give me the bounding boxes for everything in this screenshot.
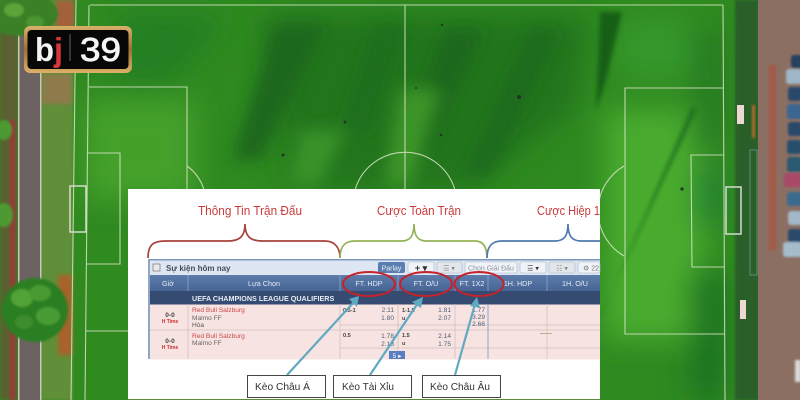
callout ring: FT. O/U	[400, 272, 452, 296]
logo: bj 39: 39	[80, 31, 121, 68]
toolbar: ☰ ▾	[527, 266, 539, 272]
column headers: Lựa Chọn	[248, 279, 280, 288]
match rows: 2.07	[438, 315, 451, 322]
league row: UEFA CHAMPIONS LEAGUE QUALIFIERS	[192, 294, 334, 303]
match rows: 0.5-1	[343, 308, 356, 314]
match rows: 2.66	[472, 321, 485, 328]
label box: Kèo Tài Xỉu	[334, 376, 412, 398]
match rows: 1.78	[381, 333, 394, 340]
toolbar: Sự kiện hôm nay	[166, 264, 231, 273]
players	[282, 24, 684, 191]
right verge and road	[735, 0, 800, 400]
match rows	[148, 259, 600, 360]
column headers: 1H. HDP	[504, 279, 532, 288]
match rows: 1.5	[402, 333, 410, 339]
brace: first half	[487, 224, 600, 258]
match rows: 1-1.5	[402, 308, 415, 314]
panel: odds table screenshot	[128, 189, 600, 400]
label box: Kèo Châu Âu	[422, 376, 500, 398]
arrow: Kèo Châu Á	[287, 296, 359, 375]
match rows: Red Bull Salzburg	[192, 307, 245, 314]
match rows: Malmo FF	[192, 340, 222, 347]
toolbar: + ▾	[415, 263, 428, 273]
logo: bj 39: j	[53, 31, 63, 68]
league row	[150, 291, 600, 304]
match rows: Malmo FF	[192, 315, 222, 322]
label box: Kèo Tài Xỉu: Kèo Tài Xỉu	[342, 381, 394, 393]
match rows: u	[402, 316, 406, 322]
match rows: 5 ▸	[393, 353, 402, 360]
match rows: 2.14	[438, 333, 451, 340]
arrow: Kèo Châu Âu	[455, 297, 480, 375]
match rows: 1.77	[472, 307, 485, 314]
match rows: H Time	[162, 345, 179, 351]
match rows: 2.11	[382, 307, 394, 314]
logo: bj 39	[24, 26, 132, 73]
toolbar: ☰ ▾	[443, 266, 455, 272]
match rows: Red Bull Salzburg	[192, 333, 245, 340]
table	[148, 259, 600, 360]
label box: Kèo Châu Âu: Kèo Châu Âu	[430, 380, 490, 393]
match rows: 0-0	[165, 338, 175, 345]
arrow: Kèo Tài Xỉu	[370, 297, 423, 375]
match rows: H Time	[162, 319, 179, 325]
left trees	[0, 0, 68, 342]
match rows: 1.80	[381, 315, 394, 322]
callout ring: FT. HDP	[343, 272, 395, 296]
match rows: 2.13	[381, 341, 394, 348]
column headers	[150, 275, 600, 291]
toolbar: ☷ ▾	[556, 266, 568, 272]
parked cars	[783, 55, 800, 382]
column headers: FT. HDP	[355, 279, 383, 288]
left verge and road	[0, 0, 74, 400]
column headers: FT. O/U	[414, 279, 438, 288]
column headers: FT. 1X2	[460, 279, 484, 288]
toolbar	[148, 259, 600, 275]
column headers: Giờ	[162, 279, 174, 288]
match rows: 0.5	[343, 333, 351, 339]
heading: Cược Hiệp 1: Cược Hiệp 1	[537, 204, 600, 218]
match rows: 1.81	[438, 307, 451, 314]
toolbar: Parlay	[382, 266, 402, 272]
logo: bj 39: b	[35, 31, 54, 68]
label box: Kèo Châu Á	[248, 376, 326, 398]
match rows: 3.29	[472, 314, 485, 321]
label box: Kèo Châu Á: Kèo Châu Á	[255, 380, 310, 393]
match rows: 0-0	[165, 312, 175, 319]
brace: match info	[148, 224, 340, 258]
match rows: Hòa	[192, 322, 204, 329]
goals	[70, 186, 741, 234]
toolbar: ⚙ 22	[583, 264, 599, 272]
brace: full match	[340, 224, 487, 258]
heading: Thông Tin Trận Đấu: Thông Tin Trận Đấu	[198, 204, 302, 218]
heading: Cược Toàn Trận: Cược Toàn Trận	[377, 204, 461, 218]
toolbar: Chọn Giải Đấu	[468, 264, 514, 272]
match rows: 1.75	[438, 341, 451, 348]
column headers: 1H. O/U	[562, 279, 588, 288]
match rows: u	[402, 341, 406, 347]
callout ring: FT. 1X2	[454, 272, 504, 296]
